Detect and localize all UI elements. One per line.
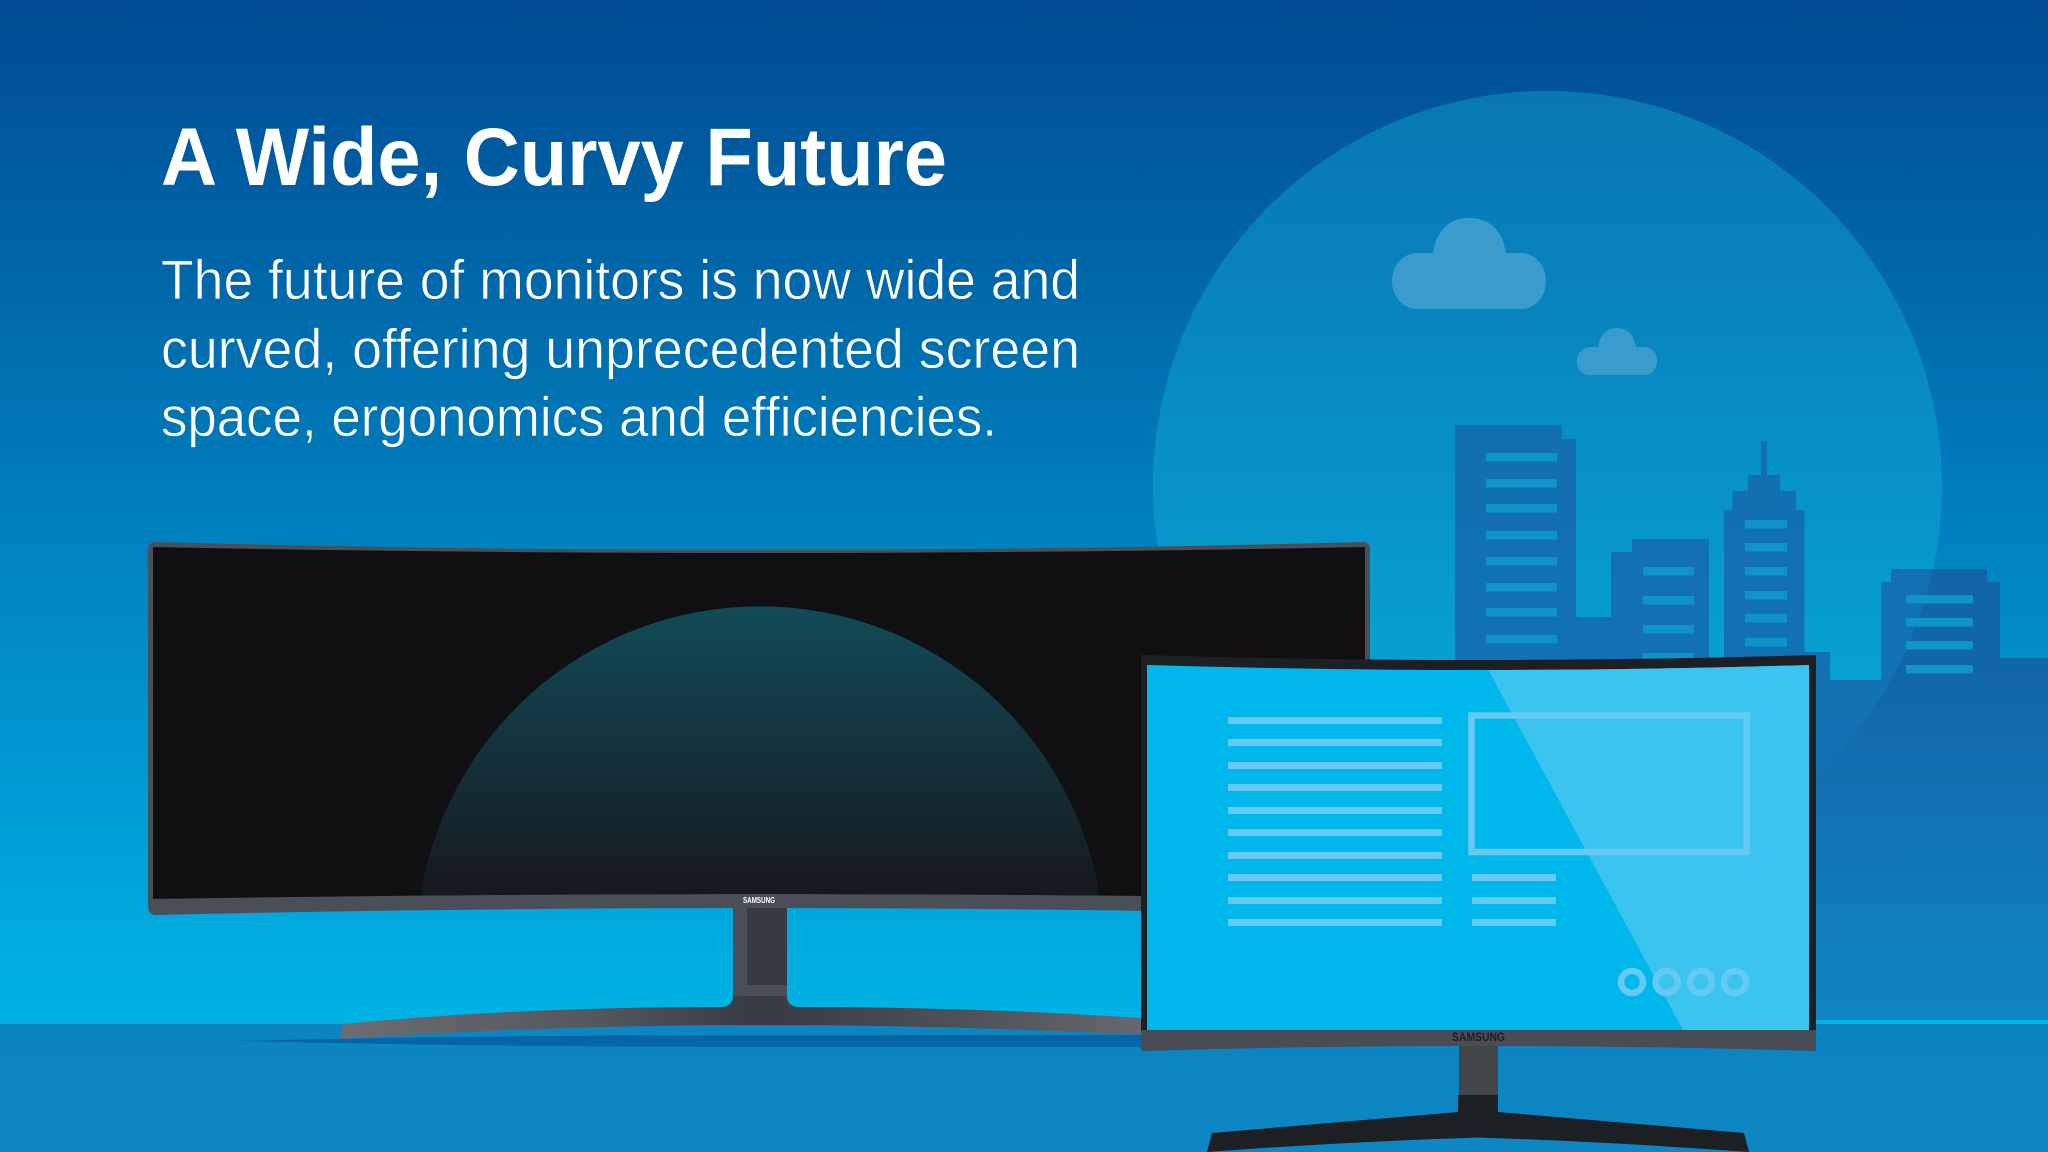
screen glare [1483,660,1809,1030]
monitor screen [1147,660,1809,1030]
title: A Wide, Curvy Future [161,112,947,203]
monitor stand base [1207,1095,1749,1152]
intro paragraph: curved, offering unprecedented screen [161,317,1080,380]
skyline silhouette buildings [1455,425,2048,1020]
monitor stand base [340,908,1180,1039]
monitor stand neck panel [747,908,787,985]
brand label: SAMSUNG [1452,1032,1505,1044]
icon: small cloud [1577,328,1657,375]
skyline windows [1486,453,1973,674]
monitor screen [153,540,1365,905]
intro paragraph [161,248,1080,448]
icon: large cloud [1392,218,1546,309]
ultrawide curved monitor [148,540,1370,1047]
bottom bezel [1141,1030,1816,1051]
screen dome graphic [419,606,1101,905]
large background circle [1153,91,1942,880]
intro paragraph: space, ergonomics and efficiencies. [161,385,997,448]
screen pagination circles [1621,971,1746,993]
screen text lines [1228,717,1556,926]
clouds [1392,218,1657,375]
monitor stand neck [733,908,787,996]
floor [0,1024,2048,1152]
intro paragraph: The future of monitors is now wide and [161,248,1080,311]
brand label: SAMSUNG [743,896,775,905]
screen image placeholder [1472,716,1746,852]
monitor frame [1141,655,1816,1032]
standard curved monitor [1141,655,1816,1152]
monitor body [148,542,1370,915]
monitor stand neck [1459,1040,1498,1096]
skyline area inside the circle [1455,425,1933,708]
floor shadow [236,1035,1160,1047]
city skyline [1455,425,2048,1020]
